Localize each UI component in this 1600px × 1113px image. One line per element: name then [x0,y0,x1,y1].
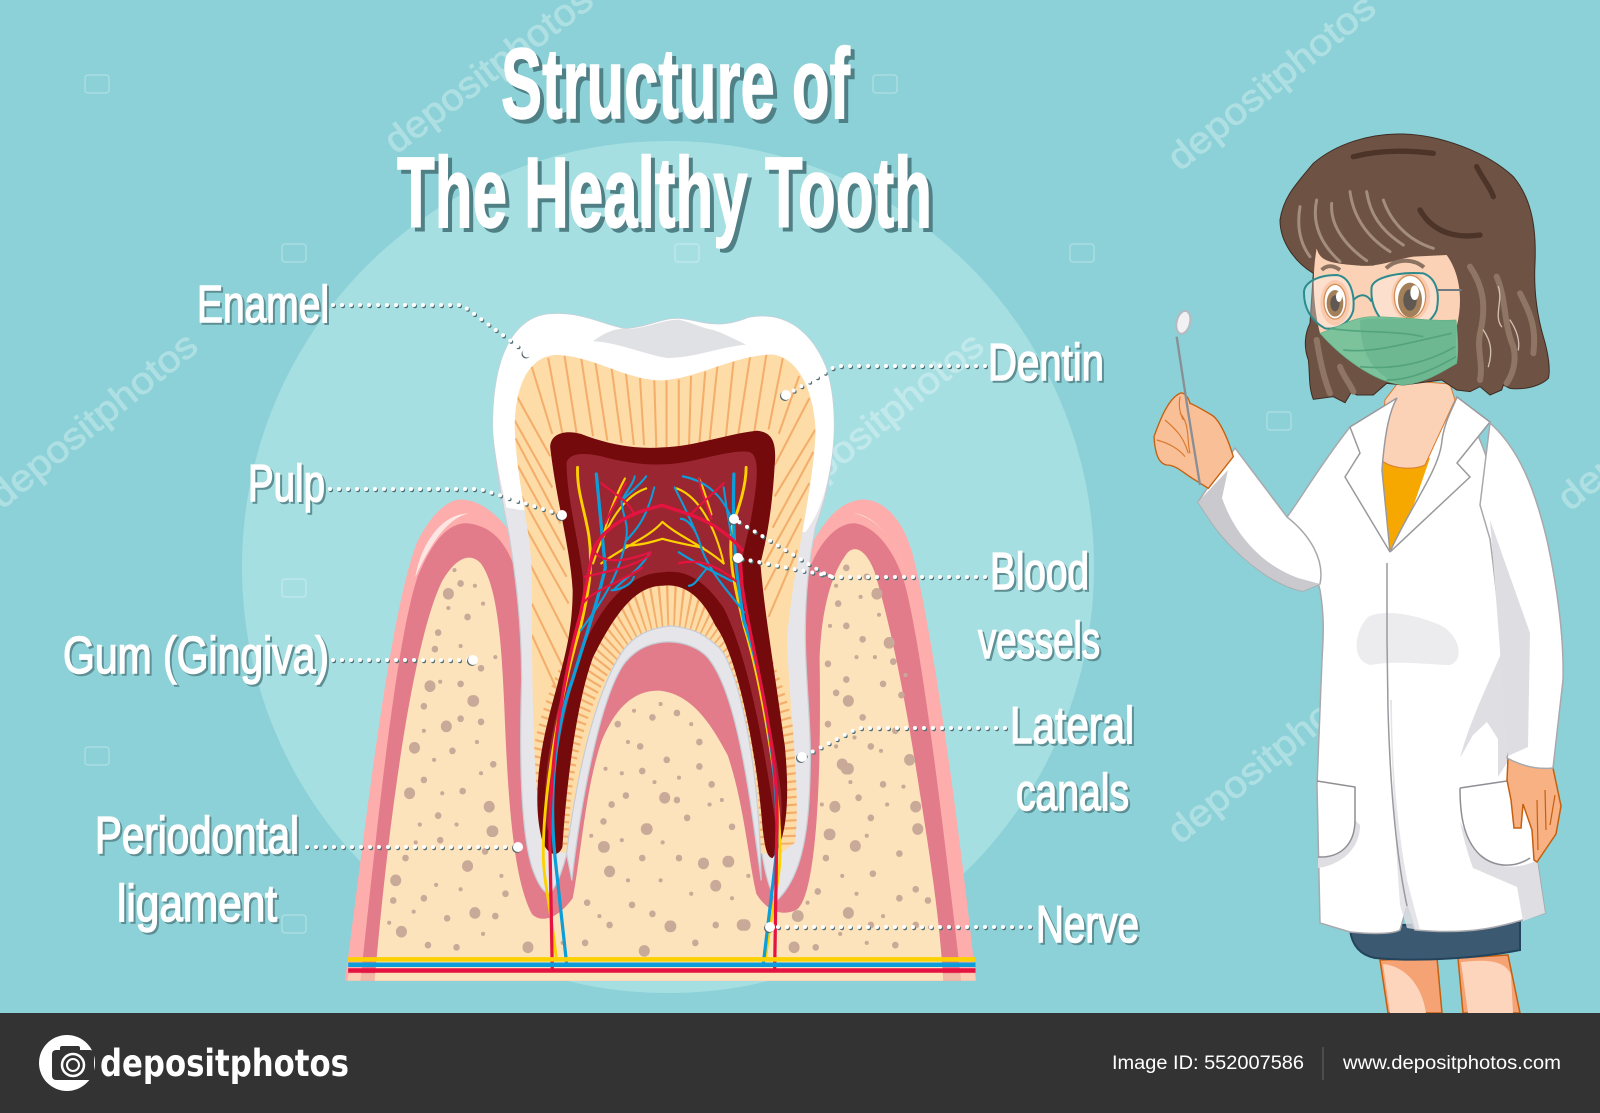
tooth diagram [345,314,976,981]
image id: Image ID: 552007586 [1112,1053,1304,1074]
doctor figure [1154,134,1563,1013]
label: Lateral canals: Lateral [1010,697,1134,755]
leader line: Pulp [330,489,567,520]
leader line: Enamel [333,305,532,358]
pulp tissue [545,452,782,831]
footer logo icon [39,1035,95,1091]
pulp chamber [537,431,787,858]
bone pores [389,568,930,951]
pockets [1317,781,1530,865]
label: Enamel: Enamel [197,276,329,334]
title: Structure of [501,28,850,140]
watermark text: depositphotos [1159,0,1383,178]
label: Periodontal ligament [95,807,299,933]
leader line: Lateral canals [797,728,1006,762]
title: The Healthy Tooth [397,137,932,249]
label: Blood vessels [978,543,1100,670]
gum inner [360,523,961,981]
label: Blood vessels: vessels [978,612,1100,670]
label: Blood vessels: Blood [990,543,1089,601]
eyes [1320,273,1430,325]
coat shading [1318,613,1545,930]
alveolar bone [375,549,943,981]
crown shading [593,320,746,358]
coat center line [1387,563,1407,906]
eyebrows [1322,261,1424,270]
hair strands [1317,267,1534,393]
watermark text [0,0,1600,851]
label: Dentin: Dentin [988,334,1104,392]
leader line: Nerve [765,922,1031,932]
head [1280,134,1549,403]
left sleeve [1198,448,1321,591]
coat collars [1345,397,1490,552]
leader line: Gum [333,655,478,665]
label: Periodontal ligament: Periodontal [95,807,299,865]
label: Lateral canals [1010,697,1134,822]
inner gum outline [567,626,761,880]
divider [1322,1047,1324,1080]
face [1314,248,1460,333]
hair [1280,134,1549,403]
bangs [1312,170,1493,266]
footer logo text: depositphotos [100,1042,349,1085]
watermark text: depositphotos [1159,659,1383,851]
glasses [1304,273,1462,329]
label: Periodontal ligament: ligament [117,875,277,933]
footer bar [0,1013,1600,1113]
right sleeve and hand [1480,423,1563,862]
neck [1379,380,1455,468]
background circle [242,141,1094,993]
watermark text: depositphotos [767,324,991,516]
gum outer [345,500,976,981]
watermark text: depositphotos [371,659,595,851]
horizontal vessels [348,959,976,971]
leader line: Periodontal ligament [307,842,523,852]
label: Pulp: Pulp [248,455,325,513]
dentin [515,354,816,854]
gum highlights [416,513,907,579]
website: www.depositphotos.com [1342,1053,1561,1074]
shirt [1379,458,1430,552]
label: Lateral canals: canals [1016,764,1129,822]
watermark camera marks [85,75,1291,933]
legs [1380,955,1520,1013]
root outer layer [493,314,834,900]
title [397,28,932,249]
skirt [1350,922,1520,960]
coat body [1287,397,1545,933]
nerves and blood vessels [543,467,780,968]
leader line: Dentin [781,366,986,400]
label: Nerve: Nerve [1036,896,1139,954]
left hand with dental mirror [1154,309,1233,488]
enamel crown [493,314,834,532]
leader lines: Blood vessels [729,514,986,578]
label: Gum (Gingiva): Gum (Gingiva) [63,627,329,685]
base strip [347,973,976,981]
surgical mask [1320,317,1458,385]
